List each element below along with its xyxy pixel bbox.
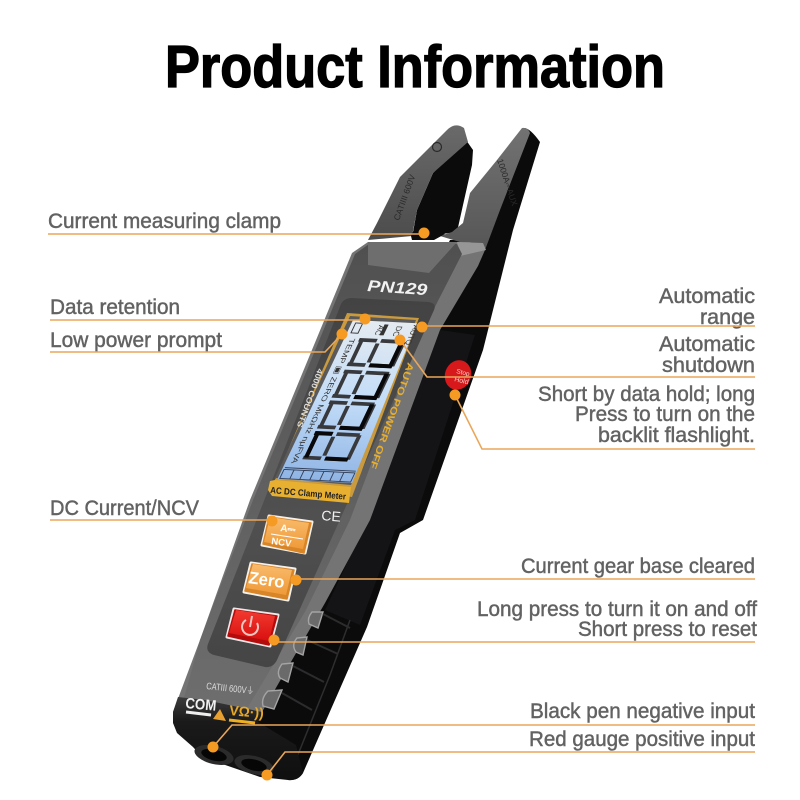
callout: black pen input — [208, 700, 755, 752]
title: Product Information — [165, 34, 665, 100]
callout: hold button: Press to turn on the — [575, 403, 755, 426]
side panel shading — [325, 330, 475, 625]
LCD — [277, 320, 428, 483]
side hold button: Stop — [456, 368, 471, 378]
callout: zero button — [290, 555, 755, 586]
callout: power button — [268, 598, 757, 646]
left clamp jaw — [368, 125, 473, 240]
V ohm label: VΩ·)) — [229, 702, 265, 721]
top icons: AUTO — [403, 325, 421, 345]
4000 counts text: 4000 COUNTS — [295, 367, 325, 429]
front face — [180, 244, 462, 712]
callout: black pen input: Black pen negative input — [530, 700, 755, 723]
CE mark: CE — [321, 507, 342, 525]
button: Zero: Zero — [247, 568, 286, 592]
callout: hold button: backlit flashlight. — [598, 424, 755, 447]
display panel — [207, 298, 435, 667]
top icons — [347, 322, 421, 345]
callout: DC current/NCV — [50, 497, 278, 526]
side hold button — [441, 356, 475, 394]
callout: automatic shutdown — [394, 333, 755, 377]
LCD unit text: TEMP ▣ ZERO MkΩHz nμFVA — [289, 338, 357, 464]
right clamp jaw: 1000A⎓AUX — [495, 158, 520, 207]
button: power — [227, 609, 278, 646]
button: A / NCV: NCV — [271, 536, 293, 550]
callout: zero button: Current gear base cleared — [521, 555, 755, 578]
LCD bottom icons — [280, 468, 356, 482]
callout: low power prompt — [50, 328, 348, 352]
grip ribs — [263, 612, 323, 709]
button: Zero — [244, 563, 295, 600]
input jacks — [192, 741, 276, 779]
side hold button: Hold — [454, 376, 469, 386]
callout: low power prompt: Low power prompt — [50, 329, 222, 352]
top notch — [368, 242, 457, 273]
LCD digit 3 — [318, 402, 374, 429]
left clamp jaw: CATIIII 600V — [391, 173, 417, 222]
rear contour line — [293, 620, 350, 767]
front body — [173, 242, 485, 723]
callout: automatic range — [416, 285, 755, 332]
warning triangle — [213, 709, 226, 721]
button: A / NCV: A⎓ — [280, 523, 296, 536]
LCD digit 1 — [347, 340, 404, 366]
clamp throat — [411, 228, 445, 240]
callout: power button: Long press to turn it on and off — [477, 598, 757, 621]
meter name strip: AC DC Clamp Meter — [270, 485, 347, 502]
callout: current measuring clamp: Current measuring clamp — [48, 210, 281, 233]
rating text: CATIII 600V⏚ — [206, 681, 255, 697]
bottom black band — [173, 697, 303, 780]
callout: data retention: Data retention — [50, 296, 180, 319]
LCD digit 2 — [332, 371, 389, 398]
callout: hold button — [450, 383, 755, 449]
callout: power button: Short press to reset — [578, 618, 757, 641]
LCD digit 4 — [303, 433, 360, 460]
LCD frame — [270, 313, 419, 497]
callout: red gauge input: Red gauge positive input — [529, 728, 755, 751]
callout: automatic shutdown: shutdown — [662, 354, 755, 377]
auto power off text: AUTO POWER OFF — [367, 361, 416, 470]
callout: automatic range: range — [700, 306, 755, 329]
right clamp jaw — [440, 128, 530, 250]
callout: red gauge input — [262, 728, 755, 780]
callout: automatic range: Automatic — [659, 285, 755, 308]
COM label: COM — [185, 695, 217, 715]
callout: DC current/NCV: DC Current/NCV — [50, 497, 199, 520]
callout: data retention — [50, 296, 370, 324]
top icons: DC — [390, 326, 404, 337]
right bevel tip — [457, 242, 486, 256]
top icons: AC — [372, 325, 386, 336]
callout: current measuring clamp — [48, 210, 430, 238]
black side of the body — [250, 128, 540, 780]
callout: automatic shutdown: Automatic — [659, 333, 755, 356]
callout: hold button: Short by data hold; long — [538, 383, 755, 406]
model label: PN129 — [367, 278, 428, 299]
device: clamp meter — [173, 125, 540, 780]
button: A / NCV — [262, 516, 312, 553]
